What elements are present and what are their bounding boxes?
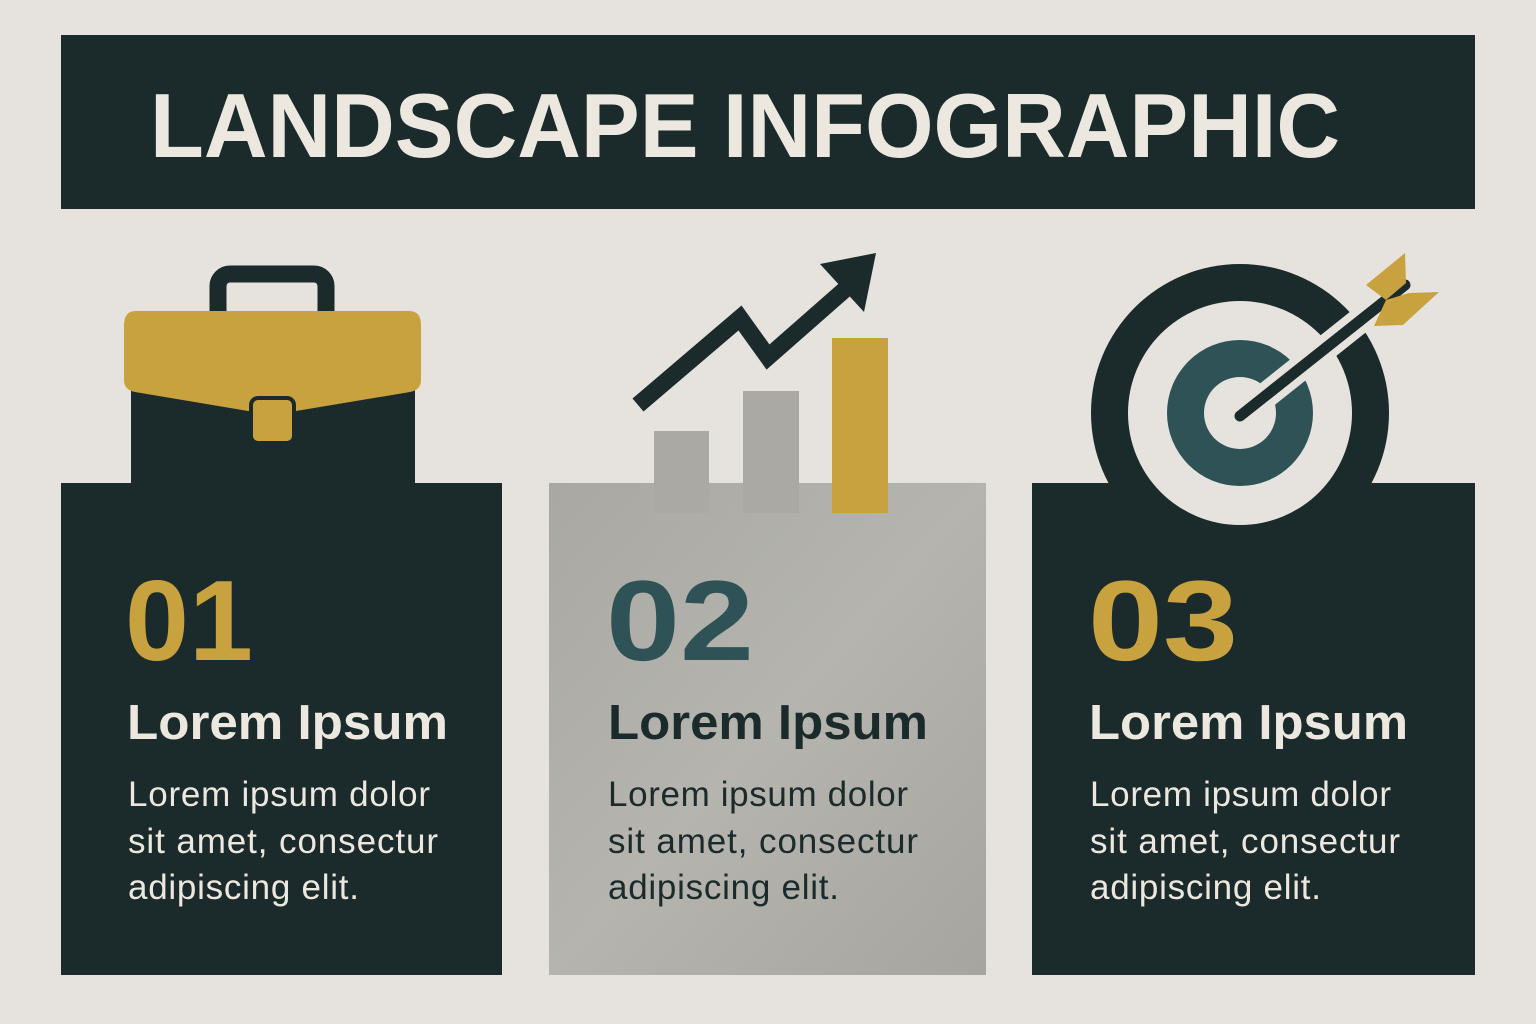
number 03: 03 bbox=[1088, 558, 1238, 685]
heading 1: Lorem Ipsum bbox=[127, 696, 448, 750]
icon: briefcase bbox=[124, 274, 421, 490]
body 2: Lorem ipsum dolor bbox=[608, 775, 908, 814]
panel 2: chart bbox=[549, 253, 986, 975]
body 1: sit amet, consectur bbox=[128, 822, 438, 861]
body 1: Lorem ipsum dolor bbox=[128, 775, 430, 814]
title bar bbox=[61, 35, 1475, 209]
heading 3: Lorem Ipsum bbox=[1089, 696, 1408, 750]
icon: bar chart bbox=[638, 253, 888, 513]
number 02: 02 bbox=[606, 558, 754, 685]
heading 2: Lorem Ipsum bbox=[608, 696, 928, 750]
body 1: adipiscing elit. bbox=[128, 868, 359, 907]
panel 3: target bbox=[1032, 253, 1475, 975]
icon: target bbox=[1091, 253, 1439, 562]
body 3: Lorem ipsum dolor bbox=[1090, 775, 1391, 814]
title bar: LANDSCAPE INFOGRAPHIC bbox=[150, 76, 1340, 177]
body 2: sit amet, consectur bbox=[608, 822, 918, 861]
number 01: 01 bbox=[125, 558, 253, 685]
body 3: adipiscing elit. bbox=[1090, 868, 1321, 907]
body 3: sit amet, consectur bbox=[1090, 822, 1400, 861]
body 2: adipiscing elit. bbox=[608, 868, 839, 907]
panel 1: briefcase bbox=[61, 274, 502, 975]
